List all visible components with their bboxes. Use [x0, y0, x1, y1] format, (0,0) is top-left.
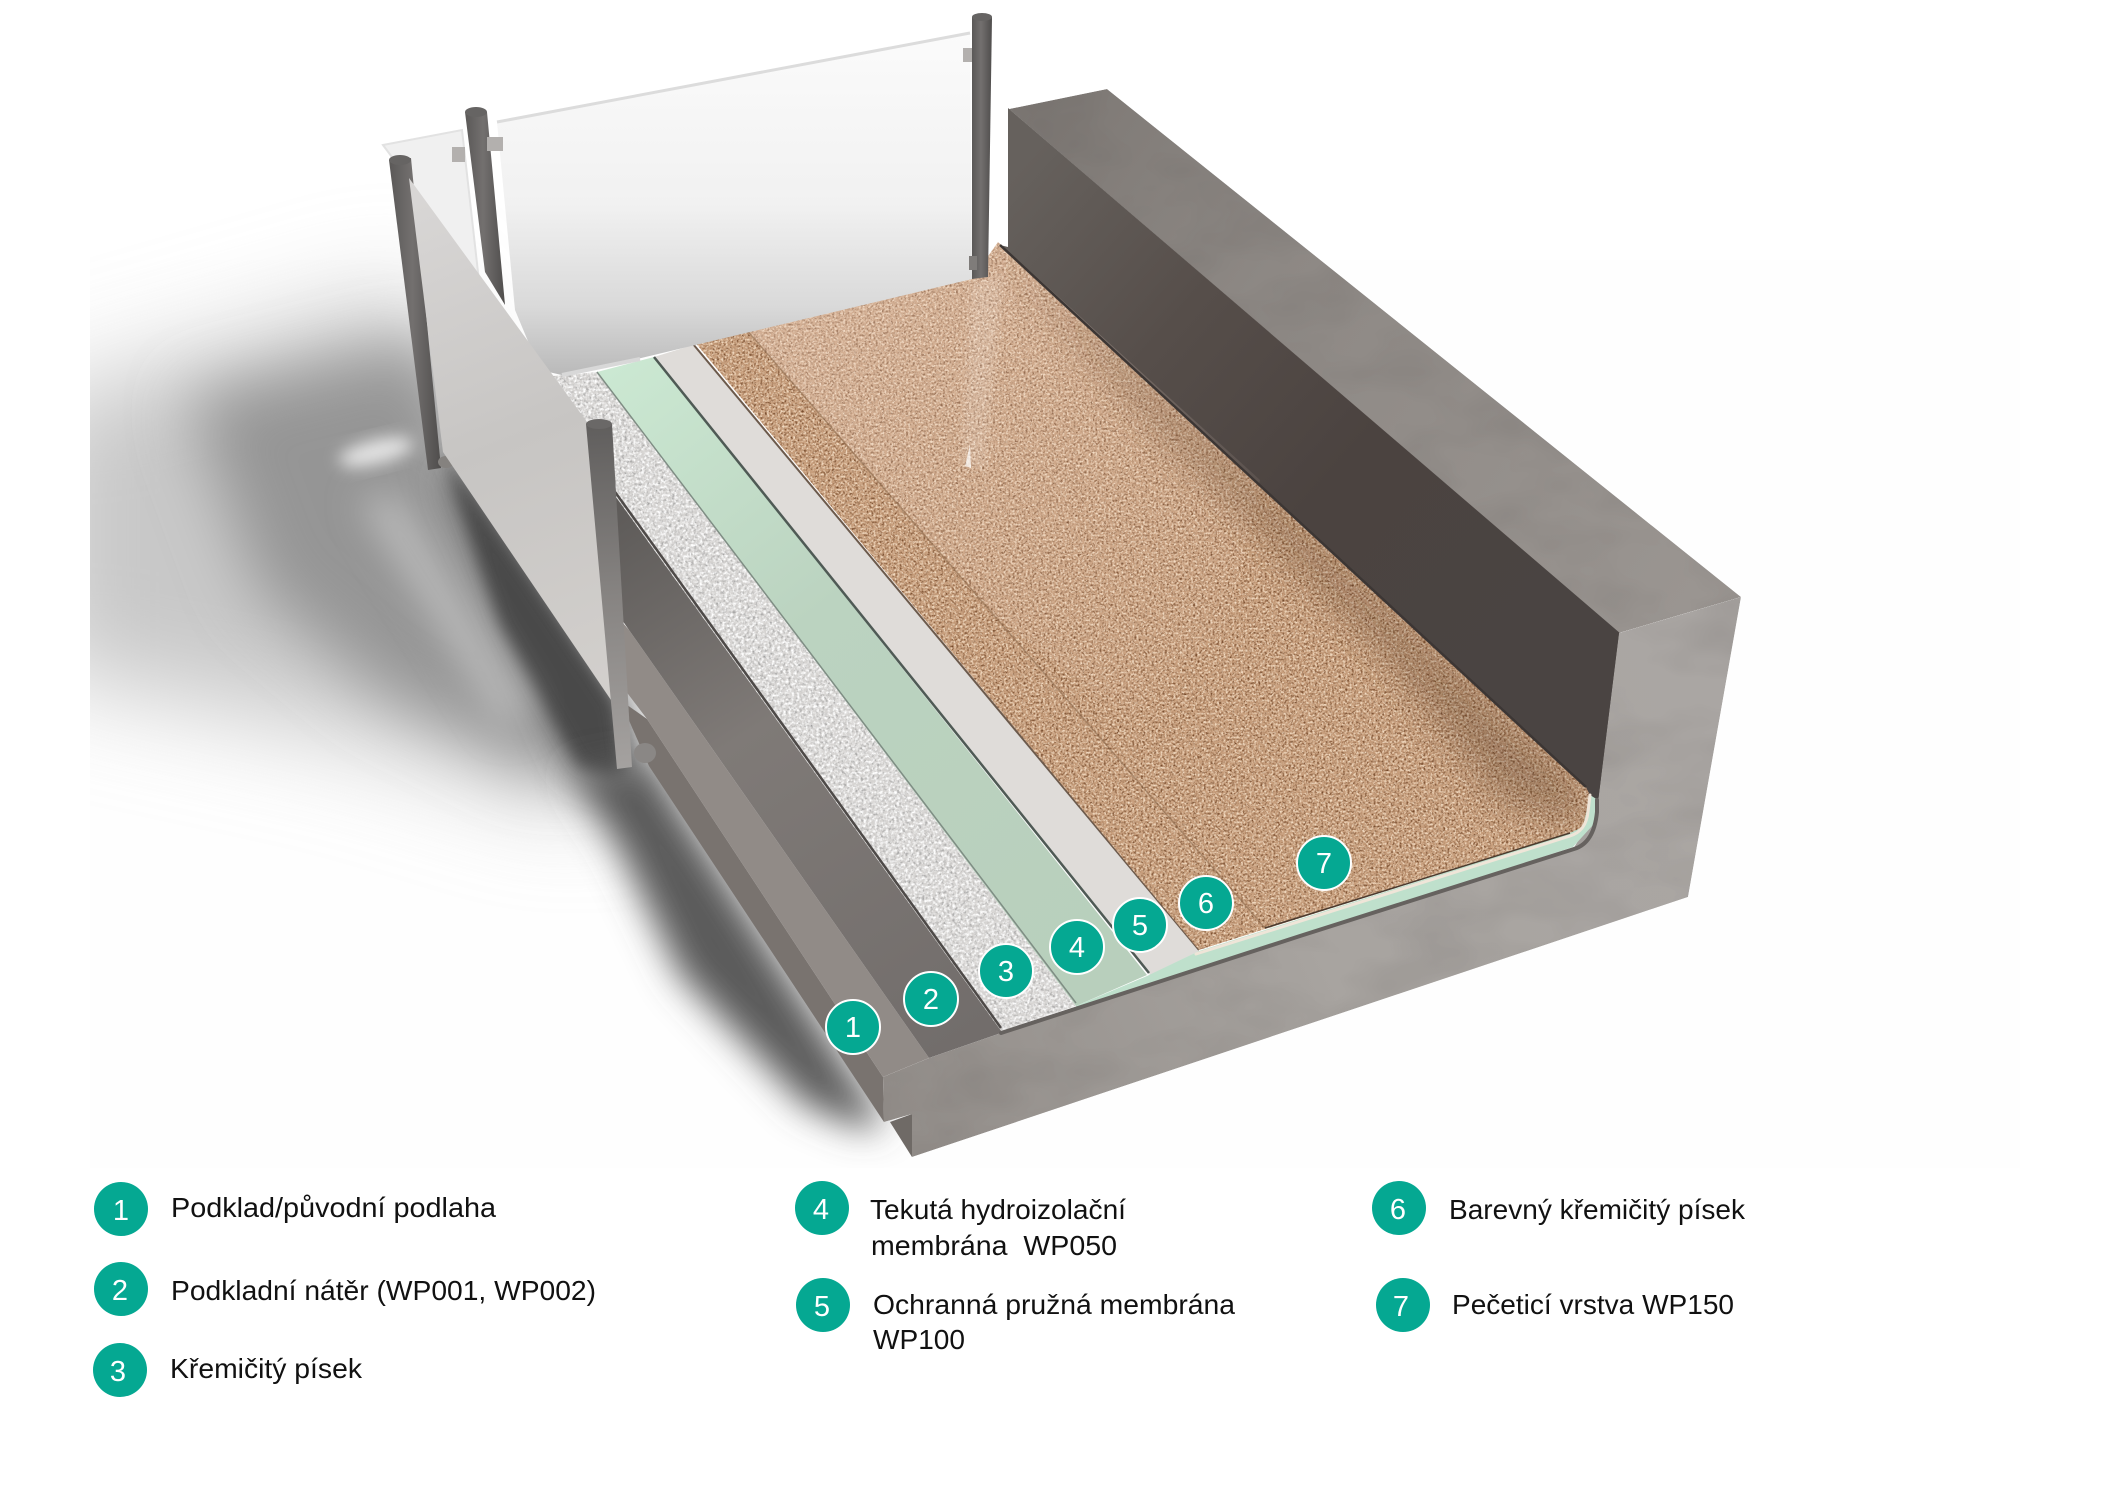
marker 4: 4: [1069, 932, 1085, 964]
marker 7: 7: [1316, 848, 1332, 880]
legend item 5: WP100: [873, 1324, 965, 1355]
front cut face: [883, 597, 1741, 1157]
reflection streak: [962, 275, 1003, 470]
legend item 2: Podkladní nátěr (WP001, WP002): [171, 1275, 596, 1306]
post: far left: [452, 107, 505, 305]
marker 5: 5: [1132, 910, 1148, 942]
clamp: [634, 743, 656, 763]
marker 1: [826, 1000, 880, 1054]
marker 4: [1050, 920, 1104, 974]
concrete structure: [600, 89, 1741, 1157]
legend: [93, 1181, 1746, 1397]
legend item 7: [1376, 1278, 1734, 1332]
marker 2: [904, 972, 958, 1026]
layer 6 and 7: coloured sand: [693, 242, 1590, 950]
layer 5: protective membrane: [654, 345, 1199, 975]
legend item 5: Ochranná pružná membrána: [873, 1289, 1235, 1320]
legend item 4: [795, 1181, 1126, 1261]
legend item 1: [94, 1182, 496, 1236]
legend item 3: Křemičitý písek: [170, 1353, 363, 1384]
legend item 1: 1: [113, 1195, 129, 1227]
marker 6: [1179, 876, 1233, 930]
marker 1: 1: [845, 1012, 861, 1044]
legend item 4: membrána WP050: [871, 1230, 1117, 1261]
legend item 2: [94, 1262, 596, 1316]
marker 6: 6: [1198, 888, 1214, 920]
layer 4: green membrane: [597, 357, 1147, 1006]
marker 2: 2: [923, 984, 939, 1016]
legend item 7: Pečeticí vrstva WP150: [1452, 1289, 1734, 1320]
post: back left: [389, 155, 454, 470]
clamps: [963, 48, 972, 62]
legend item 3: 3: [110, 1356, 126, 1388]
under ledge face: [890, 1114, 912, 1157]
membrane edge lines: [1001, 795, 1597, 1033]
clamp: [438, 456, 454, 468]
marker 3: 3: [998, 956, 1014, 988]
marker 3: [979, 944, 1033, 998]
legend item 7: 7: [1393, 1291, 1409, 1323]
glint: [965, 445, 971, 468]
frosted side glass: [409, 178, 613, 703]
background shadow: [90, 260, 902, 1153]
post: far right: [963, 13, 992, 279]
diagram markers: [826, 836, 1351, 1054]
legend item 5: [796, 1278, 1235, 1355]
layer 3: quartz sand: [530, 372, 1076, 1031]
clamps: [452, 147, 465, 162]
legend item 6: [1372, 1181, 1746, 1235]
legend item 6: Barevný křemičitý písek: [1449, 1194, 1746, 1225]
legend item 2: 2: [112, 1275, 128, 1307]
legend item 5: 5: [814, 1291, 830, 1323]
layer edge lines: [533, 344, 1199, 1028]
left far glass panel: [383, 130, 480, 290]
layer 2: primer: [600, 472, 1001, 1058]
far glass panel: [497, 33, 972, 376]
membrane edge wedge: [1076, 795, 1598, 1010]
wall top face: [1009, 89, 1741, 633]
legend item 4: Tekutá hydroizolační: [870, 1194, 1126, 1225]
wall shadow band: [1037, 286, 1589, 836]
marker 7: [1297, 836, 1351, 890]
wall inner face: [1000, 108, 1621, 815]
slab edge strip: [612, 610, 929, 1077]
post: front: [586, 419, 656, 769]
lower slab side: [620, 700, 884, 1122]
legend item 4: 4: [813, 1194, 829, 1226]
legend item 3: [93, 1343, 363, 1397]
marker 5: [1113, 898, 1167, 952]
gloss reflection: [745, 242, 1260, 720]
legend item 1: Podklad/původní podlaha: [171, 1192, 496, 1223]
legend item 6: 6: [1390, 1194, 1406, 1226]
